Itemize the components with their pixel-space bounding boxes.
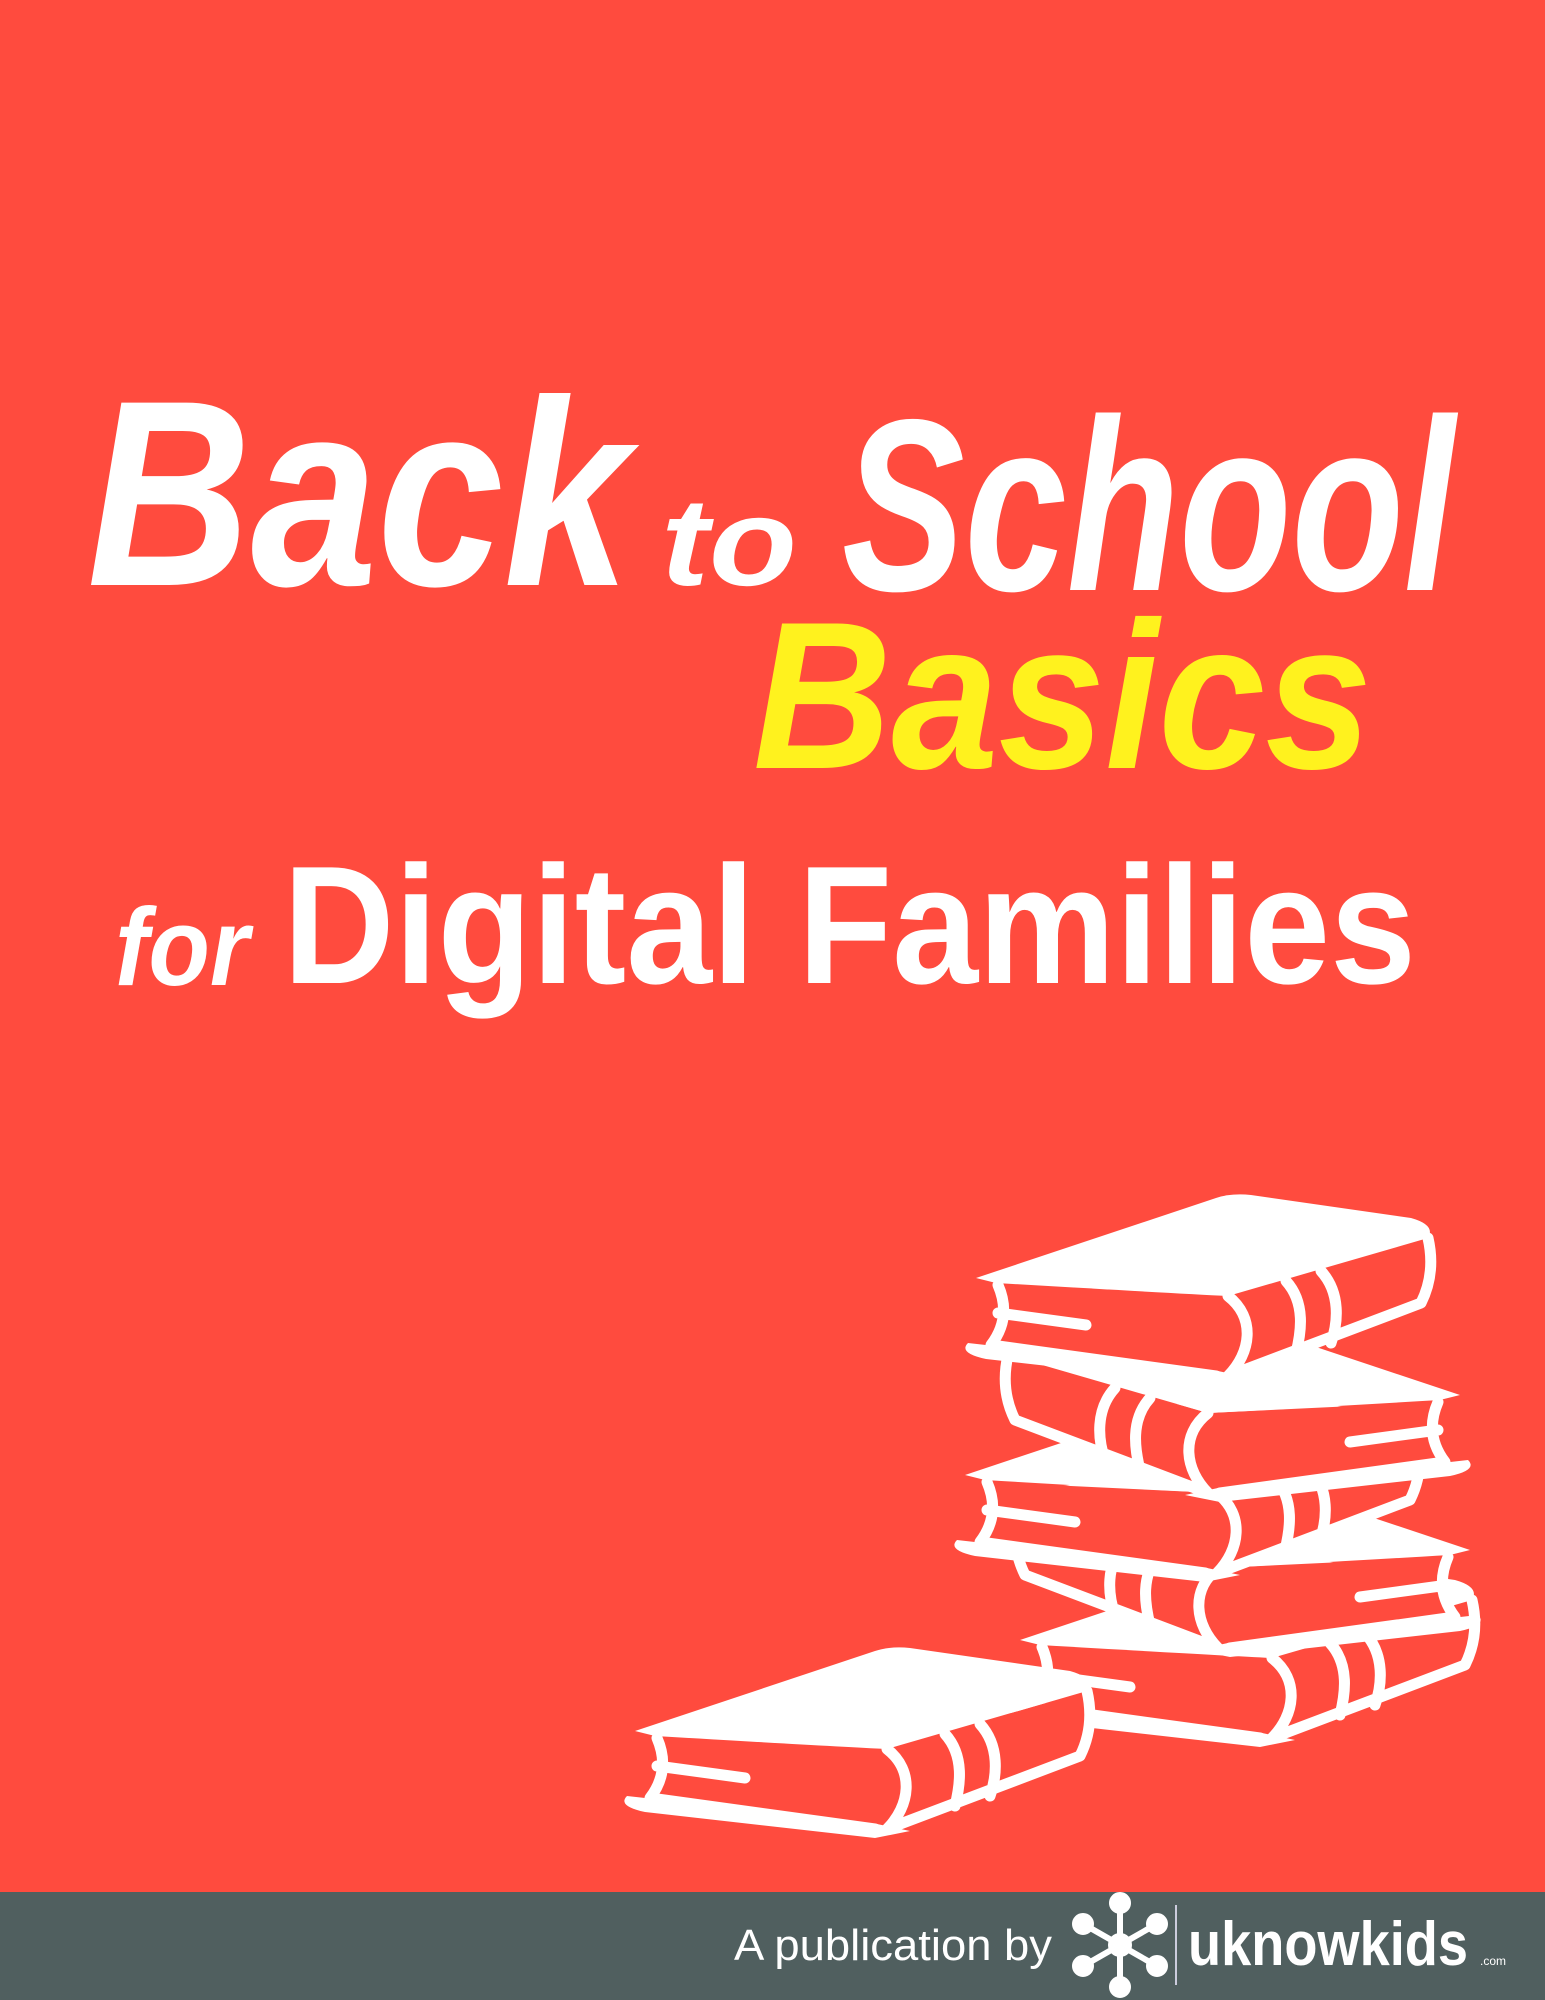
subtitle: Basics: Basics [753, 578, 1372, 813]
footer text: A publication by [734, 1921, 1052, 1970]
subtitle: for Digital Families: for [115, 886, 254, 1009]
illustration: book stack [954, 1194, 1481, 1747]
subtitle: for Digital Families: Digital Families [283, 831, 1416, 1019]
title: Back to School [87, 346, 1459, 642]
footer bar: .com [1480, 1954, 1506, 1968]
logo text: uknowkids [1188, 1910, 1468, 1979]
title: Back to School: Back [87, 346, 642, 642]
title: Back to School: to [661, 473, 797, 612]
illustration: single book [624, 1647, 1090, 1838]
footer bar [0, 1892, 1545, 2000]
icon: uknowkids snowflake logo [1075, 1895, 1165, 1995]
